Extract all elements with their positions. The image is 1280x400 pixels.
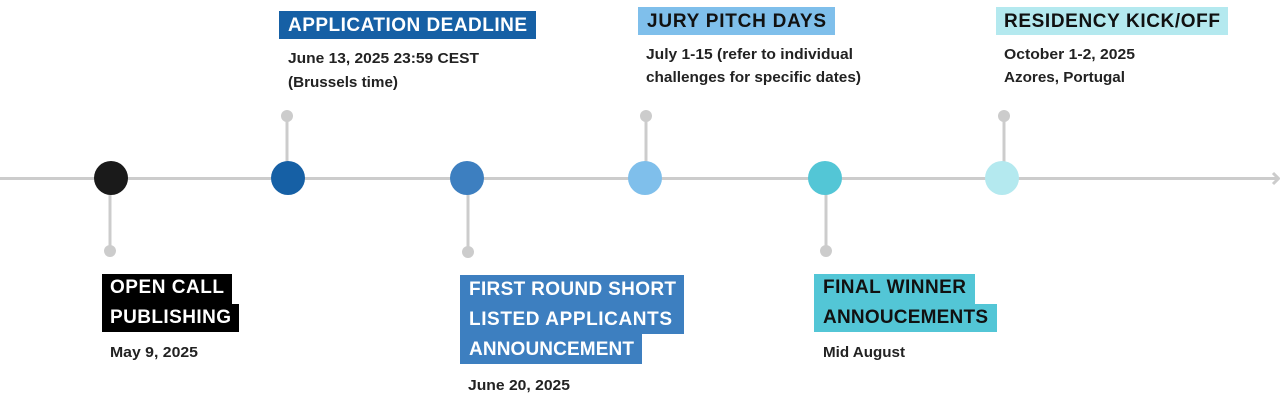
milestone: application deadline [271,11,536,195]
date: Azores, Portugal [1004,70,1125,86]
connector stem and dot [820,178,832,257]
timeline node [450,161,484,195]
heading: ANNOUCEMENTS [823,307,988,328]
heading highlight [996,7,1228,35]
heading [823,277,988,328]
heading: APPLICATION DEADLINE [288,15,527,36]
heading: FIRST ROUND SHORT [469,279,676,300]
heading: RESIDENCY KICK/OFF [1004,11,1220,32]
milestone: jury pitch days [628,7,861,195]
heading highlight [279,11,536,39]
date: October 1-2, 2025 [1004,47,1135,63]
heading highlight [102,274,239,332]
arrow: main timeline axis [0,173,1278,184]
milestone: first round shortlist [450,161,684,394]
date: June 20, 2025 [468,378,570,394]
date: Mid August [823,345,905,361]
timeline node [94,161,128,195]
milestone: open call publishing [94,161,239,361]
date: July 1-15 (refer to individual [646,47,853,63]
heading: PUBLISHING [110,307,231,328]
connector stem and dot [104,178,116,257]
date [288,51,479,91]
heading [469,279,676,360]
heading: JURY PITCH DAYS [647,11,826,32]
heading: FINAL WINNER [823,277,966,298]
milestone: residency kick-off [985,7,1228,195]
milestone: final winner announcements [808,161,997,361]
date: June 13, 2025 23:59 CEST [288,51,479,67]
heading highlight [460,275,684,364]
date: May 9, 2025 [110,345,198,361]
date: challenges for specific dates) [646,70,861,86]
connector stem and dot [640,110,652,178]
heading: ANNOUNCEMENT [469,339,634,360]
heading [110,277,231,328]
heading: LISTED APPLICANTS [469,309,672,330]
date: (Brussels time) [288,75,398,91]
connector stem and dot [998,110,1010,178]
connector stem and dot [462,178,474,258]
timeline node [271,161,305,195]
connector stem and dot [281,110,293,178]
heading: OPEN CALL [110,277,224,298]
date [1004,47,1135,86]
timeline node [985,161,1019,195]
heading highlight [638,7,835,35]
date [646,47,861,86]
timeline node [808,161,842,195]
heading highlight [814,274,997,332]
timeline node [628,161,662,195]
